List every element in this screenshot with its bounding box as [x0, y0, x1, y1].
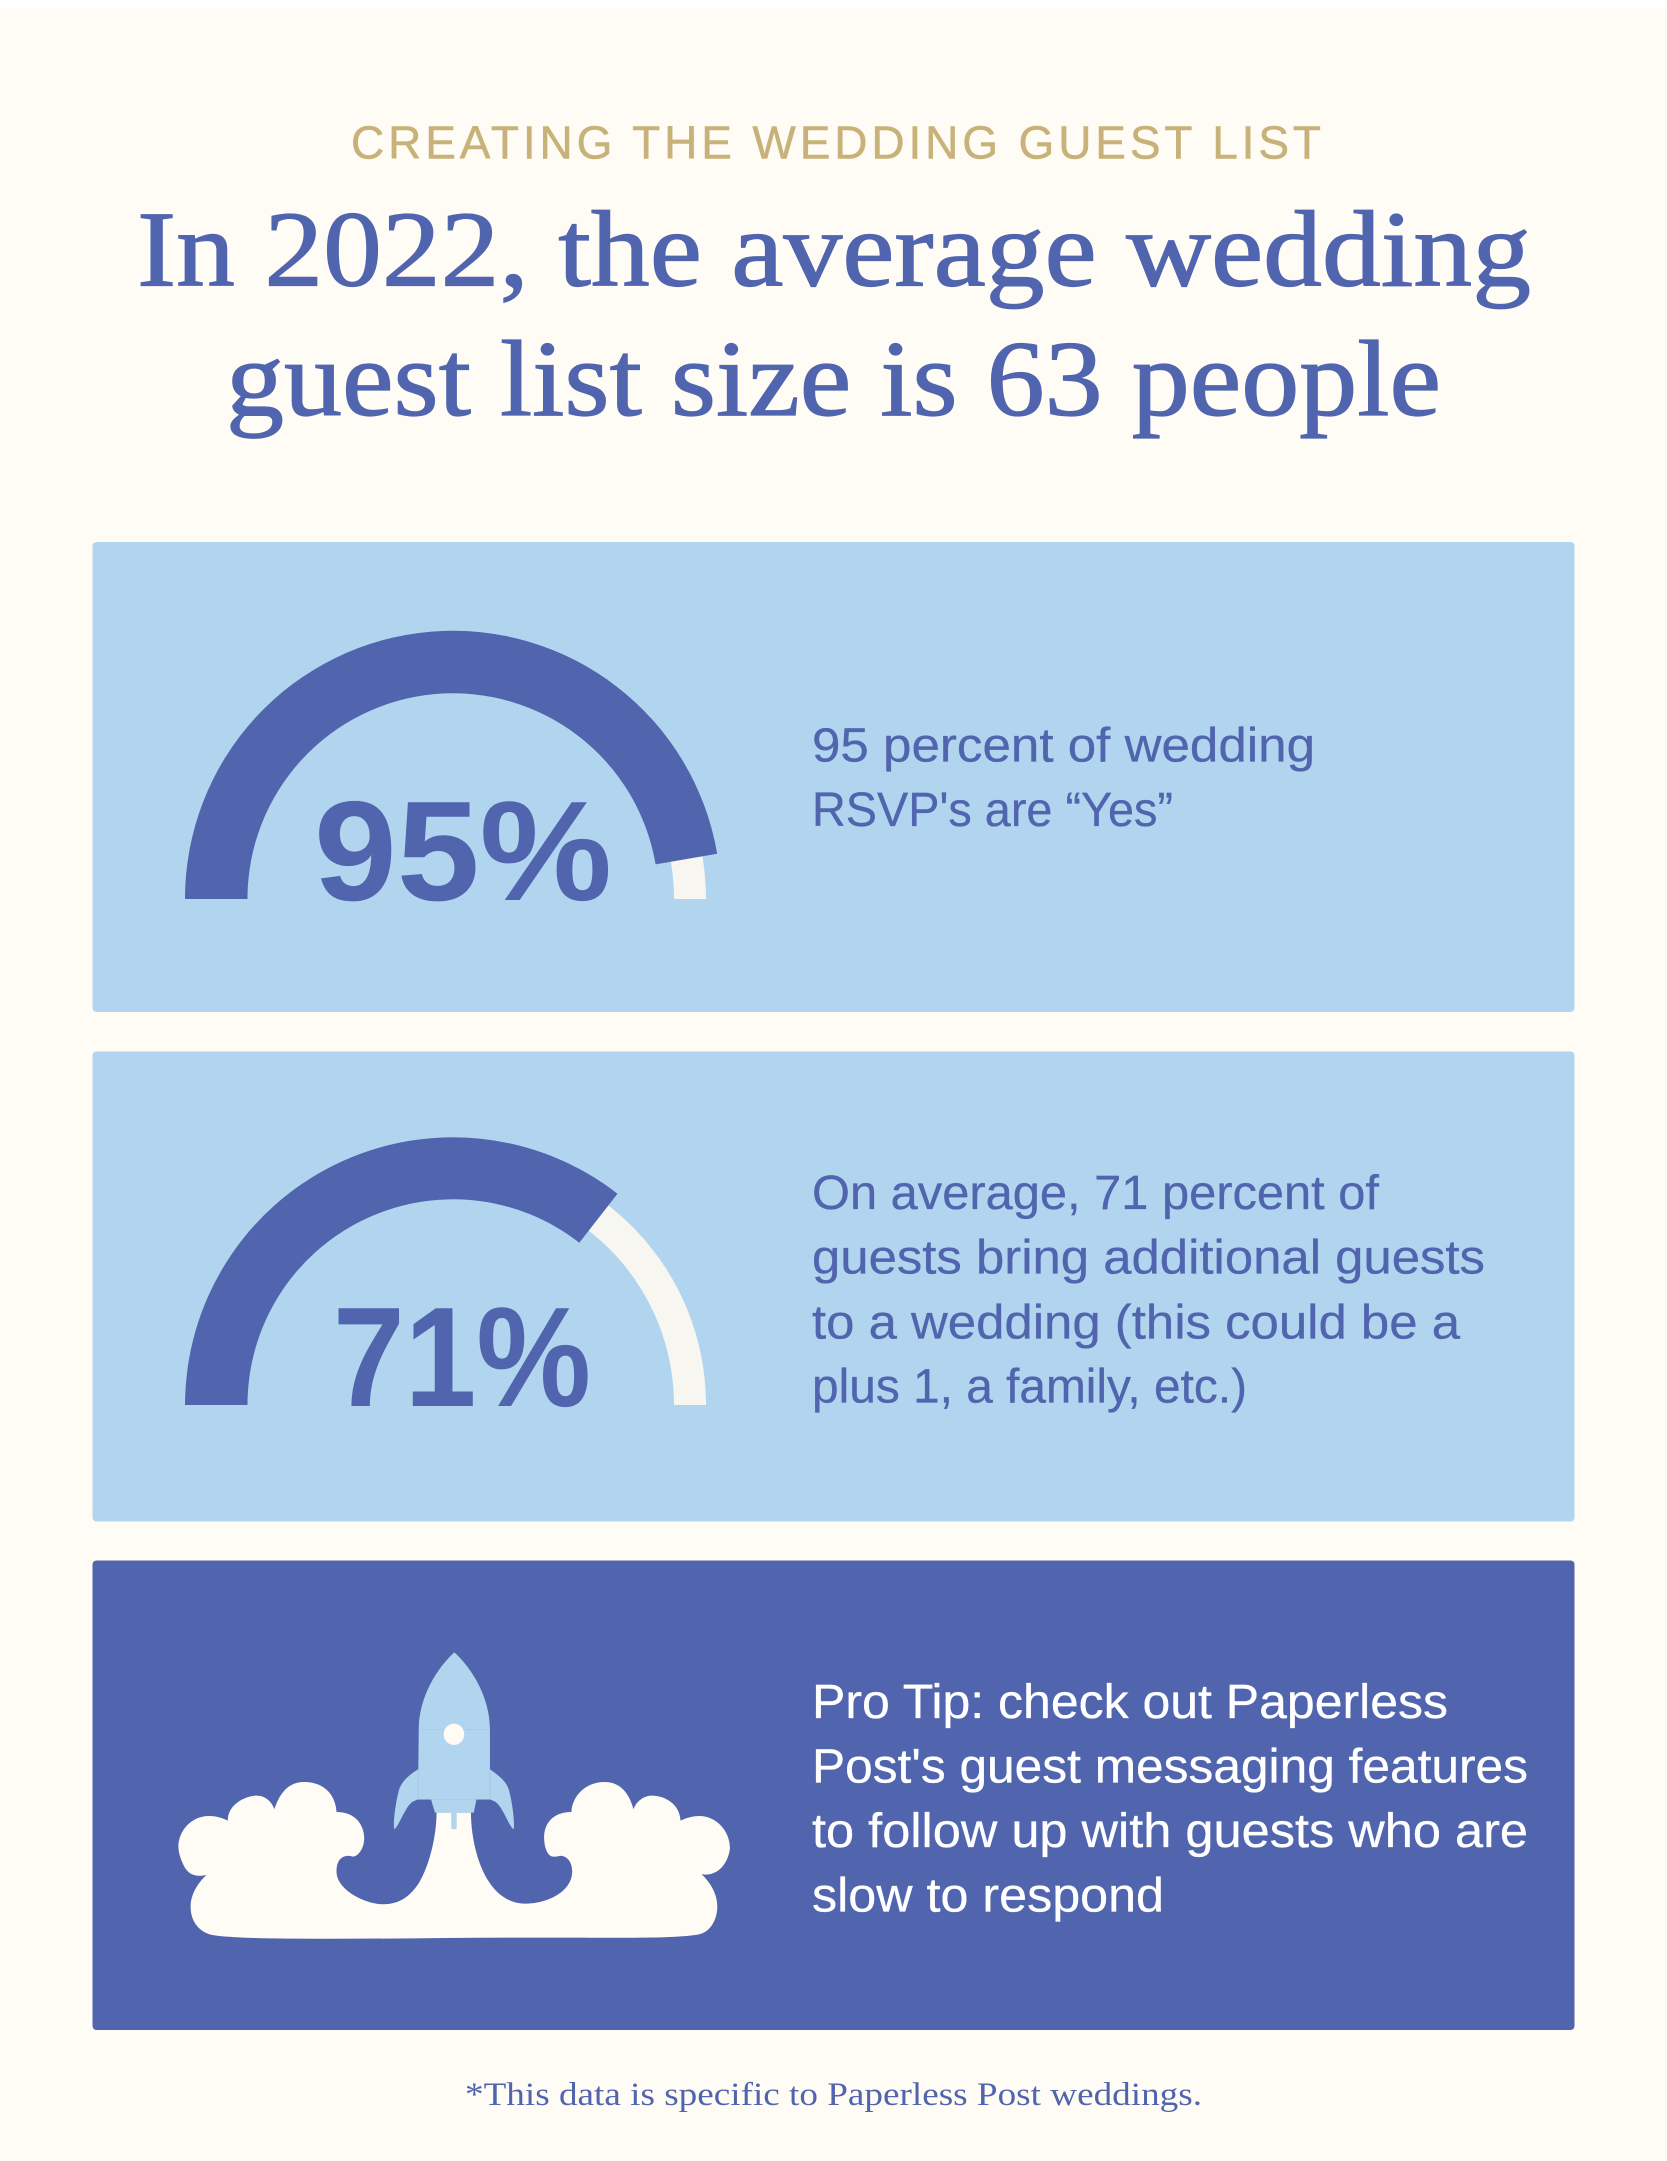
pro tip text: Post's guest messaging features [812, 1740, 1528, 1794]
pro tip text: slow to respond [812, 1870, 1164, 1922]
icon: exhaust clouds [178, 1782, 730, 1939]
stat description: to a wedding (this could be a [812, 1296, 1460, 1350]
pro tip text: to follow up with guests who are [812, 1805, 1528, 1858]
panel background [92, 542, 1574, 1012]
panel background [92, 1560, 1574, 2030]
stat description: On average, 71 percent of [812, 1167, 1380, 1220]
stat value: 71%: 71% [333, 1278, 591, 1437]
title [137, 190, 1531, 439]
pro tip text [812, 1676, 1528, 1922]
gauge: 71 percent [185, 1137, 690, 1405]
gauge: 95 percent [185, 631, 717, 899]
stat description: guests bring additional guests [812, 1232, 1485, 1284]
illustration: rocket launching from clouds [178, 1652, 730, 1939]
stat value: 95%: 95% [314, 772, 612, 931]
pro tip text: Pro Tip: check out Paperless [812, 1676, 1448, 1729]
footnote: *This data is specific to Paperless Post weddings. [465, 2077, 1202, 2113]
icon: rocket [394, 1652, 514, 1829]
panel: 71 percent stat [92, 1052, 1574, 1522]
stat description: RSVP's are “Yes” [812, 784, 1173, 837]
title: In 2022, the average wedding [137, 190, 1531, 310]
panel background [92, 1052, 1574, 1522]
panel: 95 percent stat [92, 542, 1574, 1012]
eyebrow heading: CREATING THE WEDDING GUEST LIST [351, 116, 1321, 168]
stat description: 95 percent of wedding [812, 720, 1315, 772]
stat description: plus 1, a family, etc.) [812, 1360, 1247, 1414]
stat description [812, 1167, 1485, 1414]
stat description [812, 720, 1315, 837]
title: guest list size is 63 people [226, 320, 1441, 439]
panel: pro tip [92, 1560, 1574, 2030]
